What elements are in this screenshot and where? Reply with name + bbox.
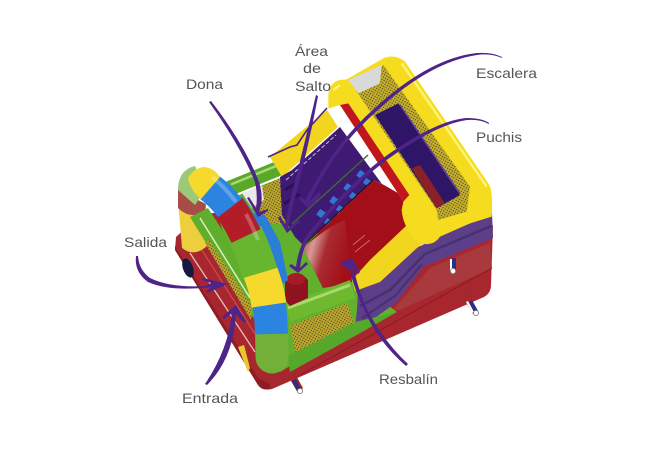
side netting: [205, 240, 252, 320]
arrow: Entrada: [205, 305, 246, 385]
arch back post: [178, 166, 208, 252]
arrow: Área de Salto: [278, 95, 318, 233]
front netting: [290, 303, 355, 355]
green floor: [215, 180, 397, 372]
callout: Escalera: [299, 53, 537, 208]
yellow slide surface: [352, 225, 440, 291]
purple side wall: [355, 213, 493, 328]
side badge: [180, 257, 196, 279]
arrow: Escalera: [299, 53, 502, 208]
purple outline on back wall: [268, 108, 327, 157]
callout: Resbalín: Resbalín: [379, 371, 438, 387]
yellow back wall: [270, 110, 338, 177]
callout: Área de Salto: de: [303, 60, 321, 76]
callout: Escalera: Escalera: [476, 65, 537, 81]
red slide: [303, 180, 425, 288]
callout: Salida: [124, 234, 228, 293]
callout: Puchis: Puchis: [476, 129, 522, 145]
arrow: Salida: [136, 256, 228, 293]
front green rail: [286, 280, 355, 322]
back green tube: [228, 169, 277, 189]
arch inner blue band: [242, 196, 288, 284]
red post: [285, 273, 308, 306]
anchor tubes: [288, 258, 479, 394]
back netting: [243, 178, 285, 225]
red inner bottom: [412, 165, 445, 208]
callout: Área de Salto: [278, 43, 331, 233]
arrow: Puchis: [289, 118, 489, 273]
callout: Dona: [186, 76, 268, 217]
callout: Dona: Dona: [186, 76, 223, 92]
callout: Área de Salto: Salto: [295, 78, 331, 94]
tower highlight: [333, 63, 487, 187]
tower netting: [353, 65, 470, 220]
purple climbing panel: [280, 127, 382, 245]
arch colour segments: [188, 167, 272, 357]
lower green rail: [288, 312, 397, 372]
callout: Entrada: Entrada: [182, 390, 238, 406]
inflatable bouncer illustration: [175, 56, 493, 394]
white top net: [348, 65, 382, 93]
arch inner green band: [190, 208, 258, 318]
callout: Salida: Salida: [124, 234, 167, 250]
callout: Puchis: [289, 118, 522, 273]
tower frame: [328, 56, 492, 244]
red base: [175, 200, 493, 390]
warning sign: [238, 345, 250, 372]
arrow: Resbalín: [339, 258, 408, 366]
blue handholds: [316, 170, 371, 226]
red rail stripe: [340, 103, 409, 202]
dark purple well: [375, 103, 460, 208]
callout: Área de Salto: Área: [295, 43, 328, 59]
yellow tower: [328, 56, 492, 244]
arrow: Dona: [209, 101, 268, 217]
callout: Entrada: [182, 305, 246, 406]
callout: Resbalín: [339, 258, 438, 387]
